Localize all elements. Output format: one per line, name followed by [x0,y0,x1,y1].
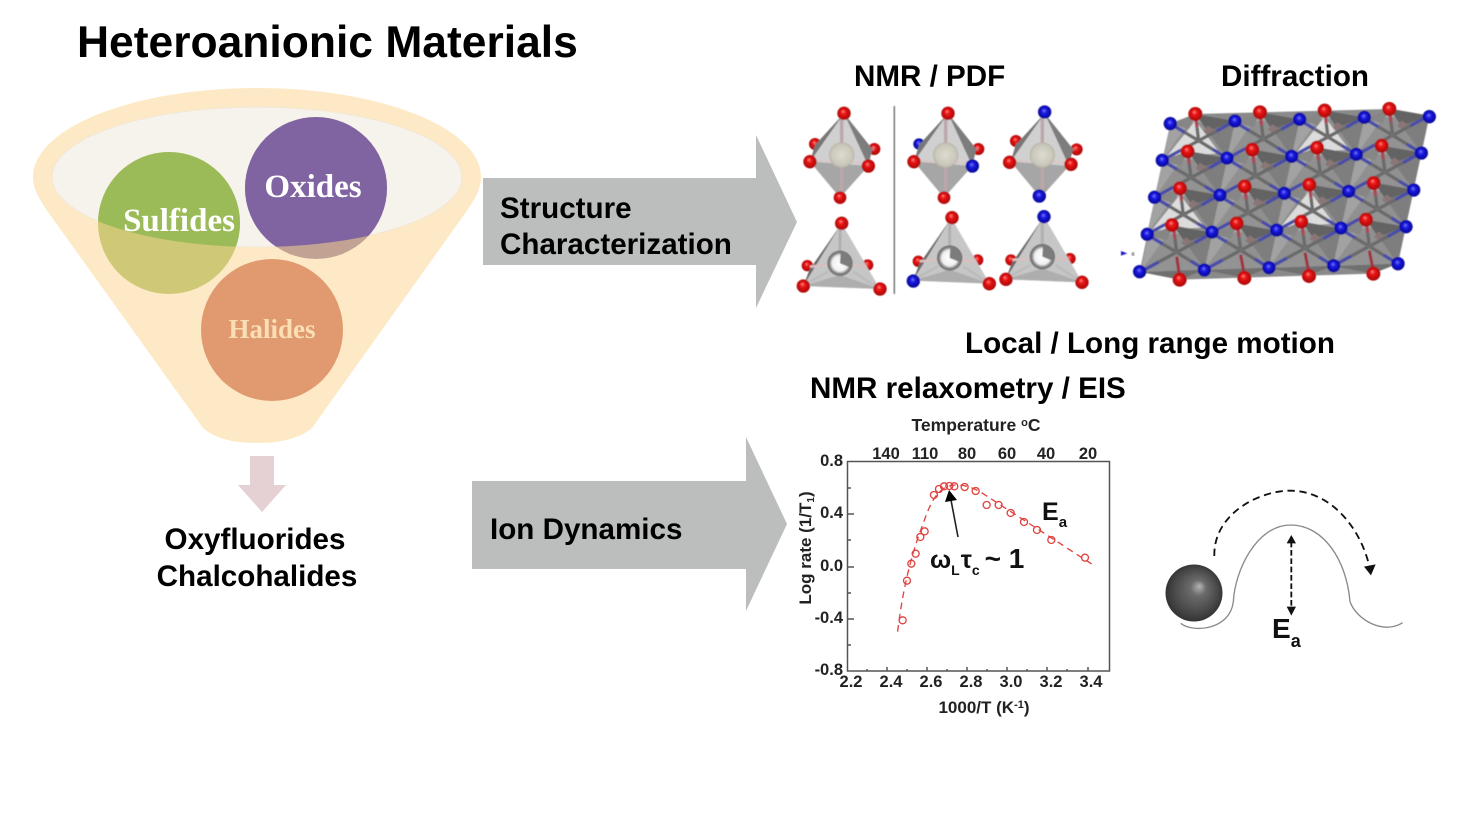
barrier curve [1181,525,1403,628]
data series [898,482,1092,632]
bottom axis: 1000/T: ) [1024,698,1030,717]
red atoms [1165,102,1396,287]
axis marker [1121,251,1135,257]
left axis: log rate: -0.4 [815,609,844,627]
octahedron 3 [1003,105,1083,203]
output label: Oxyfluorides [165,523,345,556]
bottom axis: 1000/T: 3.0 [1000,673,1022,691]
label: barrier height: a [1291,631,1302,651]
bottom axis: 1000/T [840,673,1103,717]
arrow: hop path [1214,491,1376,575]
label: barrier height: E [1272,613,1291,644]
activation barrier diagram [1166,491,1403,651]
top axis: temperature [872,415,1097,463]
tetrahedron 2 [907,211,996,290]
arrow: funnel output [238,456,286,512]
top axis: temperature: 60 [998,445,1016,463]
octahedron 1 [803,107,880,204]
top axis: temperature: 20 [1079,445,1097,463]
top axis: temperature: 40 [1037,445,1055,463]
top axis: temperature: 110 [912,445,938,463]
relaxometry chart [796,415,1110,717]
left axis: log rate: 0.4 [820,504,844,522]
label: peak condition: τ [961,546,972,574]
funnel diagram [33,88,481,443]
arrow: ion dynamics [472,437,787,611]
arrow: structure characterization [483,135,797,308]
label: peak condition: ~ 1 [985,543,1024,574]
label: peak condition: c [972,562,980,578]
infographic canvas [33,24,1437,716]
arrow: ion dynamics: Ion Dynamics [490,513,682,546]
funnel opening [52,107,462,247]
arrow: structure characterization: Characterization [500,228,732,261]
bottom axis: 1000/T: 2.6 [920,673,942,691]
output label: Chalcohalides [157,560,357,593]
polyhedra structures [797,105,1089,296]
output label [157,523,357,593]
axis marker: c [1132,251,1135,257]
circle: sulfides: Sulfides [123,203,235,239]
top axis: temperature: C [1028,415,1041,435]
heading: diffraction: Diffraction [1221,60,1369,93]
top axis: temperature: 80 [958,445,976,463]
left axis: log rate: ) [796,491,815,497]
arrow: structure characterization: Structure [500,192,632,225]
bottom axis: 1000/T: 2.4 [880,673,903,691]
arrow: energy barrier [1287,535,1296,616]
bottom axis: 1000/T: 3.4 [1080,673,1103,691]
heading: NMR relaxometry / EIS: NMR relaxometry / EIS [810,372,1126,405]
arrow: peak marker [945,490,958,537]
left axis: log rate: 0.8 [820,452,843,470]
circle: halides: Halides [228,314,316,344]
top axis: temperature: 140 [872,445,900,463]
top axis: temperature: o [1021,417,1028,429]
bottom axis: 1000/T: 1000/T (K [938,698,1014,717]
left axis: log rate [796,452,844,679]
blue atoms [1133,110,1436,278]
left axis: log rate: Log rate (1/T [796,503,815,605]
left axis: log rate: 0.0 [820,557,843,575]
funnel body [33,88,481,443]
bottom axis: 1000/T: 2.2 [840,673,862,691]
title: Heteroanionic Materials [77,18,578,67]
tetrahedron 3 [999,210,1089,289]
label: peak condition: ω [930,546,951,574]
tetrahedron 1 [797,217,887,296]
divider [892,106,896,294]
crystal structure [1121,102,1436,287]
label: activation energy: E [1042,498,1059,526]
ion sphere [1166,564,1222,622]
circle: oxides: Oxides [264,169,362,205]
bottom axis: 1000/T: 2.8 [960,673,982,691]
octahedron 2 [907,107,984,204]
bottom axis: 1000/T: -1 [1014,699,1024,711]
heading: local / long range motion: Local / Long range motion [965,327,1335,360]
left axis: log rate: -0.8 [815,661,843,679]
chart frame [847,462,1110,671]
circle: oxides [245,117,387,259]
label: peak condition: L [951,562,960,578]
circle: sulfides [98,152,240,294]
heading: NMR / PDF: NMR / PDF [854,60,1005,93]
circle: halides [201,259,343,401]
left axis: log rate: 1 [806,497,817,503]
top axis: temperature: Temperature [912,415,1016,435]
bottom axis: 1000/T: 3.2 [1040,673,1062,691]
label: activation energy: a [1059,514,1068,531]
